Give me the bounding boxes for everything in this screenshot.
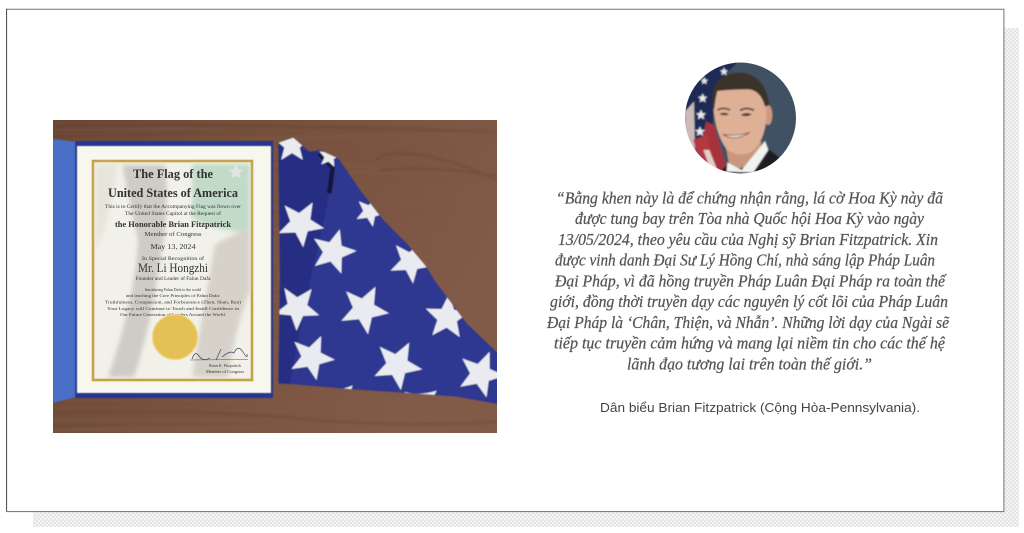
citation: and teaching the Core Principles of Falun Dafa: — [126, 293, 220, 298]
certify text line 1: This is to Certify that the Accompanying Flag was flown over — [105, 205, 241, 210]
citation: Introducing Falun Dafa to the world — [145, 287, 202, 292]
flag small stars — [695, 67, 728, 136]
flag stripes — [685, 102, 727, 170]
quote text block: Đại Pháp là ‘Chân, Thiện, và Nhẫn’. Những lời dạy của Ngài sẽ — [546, 313, 950, 332]
signer title: Member of Congress — [206, 369, 244, 374]
quote text block: được tung bay trên Tòa nhà Quốc hội Hoa Kỳ vào ngày — [575, 209, 925, 228]
gold seal — [152, 314, 198, 360]
attribution: Dân biểu Brian Fitzpatrick (Cộng Hòa-Pennsylvania). — [600, 401, 920, 415]
white star on watermark — [228, 164, 244, 178]
signature rule — [190, 359, 248, 360]
folded flag — [278, 137, 497, 404]
fold crease — [319, 153, 333, 193]
certificate — [77, 146, 271, 393]
founder line: Founder and Leader of Falun Dafa — [136, 277, 211, 282]
flag canton — [686, 62, 738, 140]
suit — [721, 148, 780, 174]
ears — [764, 105, 772, 125]
blue folder — [53, 139, 273, 403]
quote text block: “Bằng khen này là để chứng nhận rằng, lá cờ Hoa Kỳ này đã — [556, 188, 944, 208]
shirt collar — [727, 141, 768, 172]
member line: Member of Congress — [144, 231, 202, 238]
portrait background — [694, 62, 796, 170]
honoree name: the Honorable Brian Fitzpatrick — [115, 219, 231, 229]
quote text block: 13/05/2024, theo yêu cầu của Nghị sỹ Brian Fitzpatrick. Xin — [558, 230, 938, 249]
smile — [723, 132, 750, 138]
certificate title line 2: United States of America — [108, 185, 238, 200]
lit cloth — [317, 190, 487, 387]
signature — [192, 348, 247, 360]
flag cloth — [278, 145, 497, 404]
citation: Our Future Generation of Leaders Around the World. — [120, 312, 226, 317]
portrait — [685, 62, 796, 174]
date: May 13, 2024 — [150, 243, 196, 251]
photo: certificate and folded flag — [53, 120, 511, 433]
recognition: In Special Recognition of — [142, 255, 204, 262]
quote text block: Đại Pháp, vì đã hồng truyền Pháp Luân Đại Pháp ra toàn thế — [554, 272, 948, 290]
citation: Your Legacy will Continue to Touch and Instill Confidence in — [107, 306, 240, 311]
fold shadow — [277, 140, 331, 384]
brows — [718, 108, 754, 110]
recipient name: Mr. Li Hongzhi — [138, 260, 208, 275]
quote text block: tiếp tục truyền cảm hứng và mang lại niềm tin cho các thế hệ — [554, 334, 946, 353]
certify text line 2: The United States Capitol at the Request of — [125, 212, 221, 217]
quote text block: được vinh danh Đại Sư Lý Hồng Chí, nhà sáng lập Pháp Luân — [555, 251, 935, 270]
neck — [725, 142, 762, 170]
quote text block: giới, đồng thời truyền dạy các nguyên lý cốt lõi của Pháp Luân — [550, 292, 948, 311]
gold frame — [93, 161, 252, 380]
quote text block — [546, 188, 950, 374]
flag stars — [278, 137, 497, 398]
face — [713, 84, 766, 154]
citation — [105, 287, 242, 317]
hair — [712, 72, 769, 110]
faded flag watermark — [96, 164, 250, 377]
stray star tips — [343, 384, 438, 396]
certificate paper — [77, 146, 271, 393]
eyes — [719, 113, 752, 116]
certificate wording — [105, 166, 244, 374]
signer name: Brian K. Fitzpatrick — [209, 363, 242, 368]
certificate title line 1: The Flag of the — [133, 166, 213, 181]
wood table background — [53, 120, 497, 433]
citation: Truthfulness, Compassion, and Forbearance (Zhen, Shan, Ren) — [105, 300, 242, 306]
quote text block: lãnh đạo tương lai trên toàn thế giới.” — [627, 354, 872, 374]
